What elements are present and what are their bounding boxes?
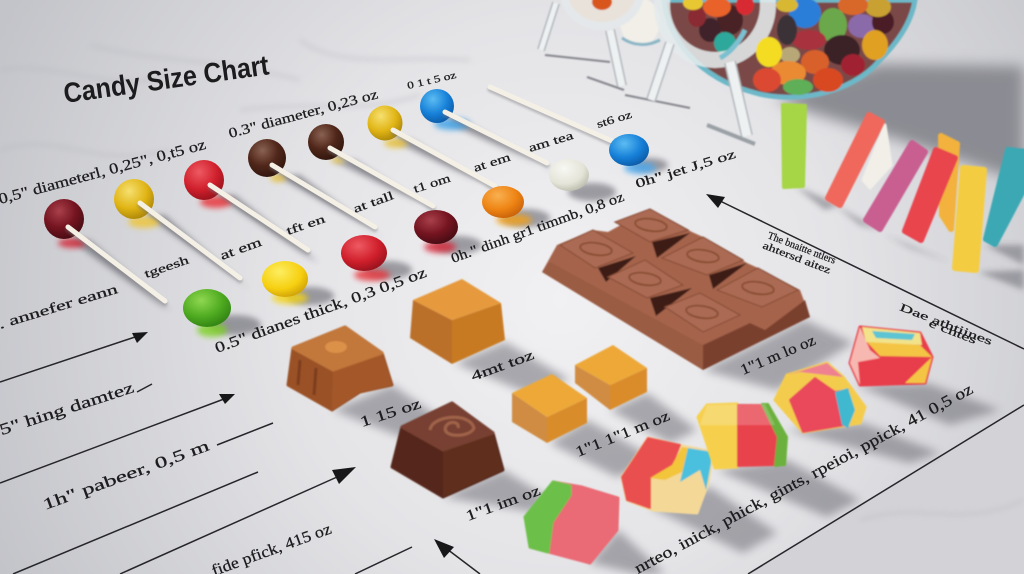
shadows: [70, 122, 668, 335]
lollipop labels: st6 oz: [595, 109, 633, 131]
small caramel front: [512, 374, 587, 443]
cast shadows: [333, 320, 853, 512]
segments: [560, 209, 798, 332]
lollipop labels: at em: [218, 234, 263, 263]
gummy 1 green pink: [525, 482, 618, 563]
glass jars with jelly beans: [541, 0, 915, 144]
sour gummy cubes: [525, 327, 1000, 574]
red stick: [905, 150, 955, 240]
lollipop labels: tgeesh: [142, 253, 190, 281]
right arrow and bottom line: [706, 194, 1024, 574]
green stick: [783, 105, 805, 187]
lollipop labels: 0.5" dianes thick, 0,3 0,5 oz: [213, 265, 429, 357]
candy labels: The bnaitte ntlers: [766, 231, 837, 267]
lollipop labels: t1 om: [412, 171, 453, 196]
embossed logos: [579, 217, 775, 320]
jar mouth ring: [662, 0, 768, 60]
lollipop labels: am tea: [527, 128, 576, 155]
chocolate bar: [542, 209, 810, 370]
lollipop labels: [0, 70, 738, 357]
candy labels: 1"1 1"1 m oz: [574, 408, 673, 461]
gummy 4 swirl: [775, 363, 865, 432]
large jar body: [664, 0, 915, 97]
teal stick: [986, 150, 1024, 244]
beans: [183, 289, 231, 327]
gummy sticks: [783, 105, 1024, 290]
small rear jar: [541, 0, 690, 108]
notches: [598, 233, 747, 316]
candy labels: 1 15 oz: [358, 396, 424, 431]
candy labels: 4mt toz: [469, 348, 536, 385]
candy labels: [358, 231, 994, 574]
lollipop labels: at tall: [351, 188, 396, 216]
yellow-orange stick: [941, 136, 957, 229]
candy labels: Dae athtiines: [898, 302, 994, 348]
yellow stick: [955, 168, 984, 270]
gummy 2 swirl: [622, 438, 713, 513]
gummy 3 striped: [698, 404, 787, 468]
lollipop labels: tft en: [284, 212, 327, 238]
white stick: [863, 125, 891, 188]
coral stick: [828, 115, 882, 205]
candy labels: 1"1 m lo oz: [738, 333, 819, 379]
sticks: [68, 87, 612, 304]
lollipop labels: 0.3" diameter, 0,23 oz: [227, 88, 380, 142]
caramel-topped chocolate: [288, 327, 392, 410]
lollipop labels: 0 1 t 5 oz: [406, 70, 458, 92]
candy labels: ahtersd aitez: [761, 241, 833, 277]
balls: [44, 199, 84, 239]
purple stick: [866, 143, 925, 229]
jelly beans: [683, 0, 894, 95]
swirl chocolate: [392, 403, 503, 497]
left size labels and arrows: [0, 282, 480, 574]
title: Candy Size Chart: [62, 49, 271, 109]
small caramel rear: [575, 345, 647, 410]
gummy 5 layered: [850, 327, 932, 385]
lollipop labels: 0h." dinh gr1 timmb, 0,8 oz: [449, 190, 626, 267]
candy labels: 1"1 im oz: [464, 483, 543, 525]
lollipop labels: at em: [472, 150, 513, 175]
lollipops and candies row: [44, 87, 668, 337]
gummy shadows: [590, 383, 1000, 574]
chocolates and caramels: [288, 279, 853, 512]
large caramel: [410, 279, 505, 364]
candy labels: e cntes: [927, 318, 978, 347]
left size labels and arrows: 1h" pabeer, 0,5 m: [41, 437, 213, 514]
coloured glows: [58, 118, 656, 337]
jar legs: [651, 43, 670, 100]
lollipop labels: 0,5" diameterl, 0,25", 0,t5 oz: [0, 137, 208, 208]
lollipop labels: 0h" jet J,5 oz: [633, 146, 738, 191]
candy labels: nrteo, inick, phick, gints, rpeioi, ppick, 41 0,5 oz: [632, 381, 976, 574]
